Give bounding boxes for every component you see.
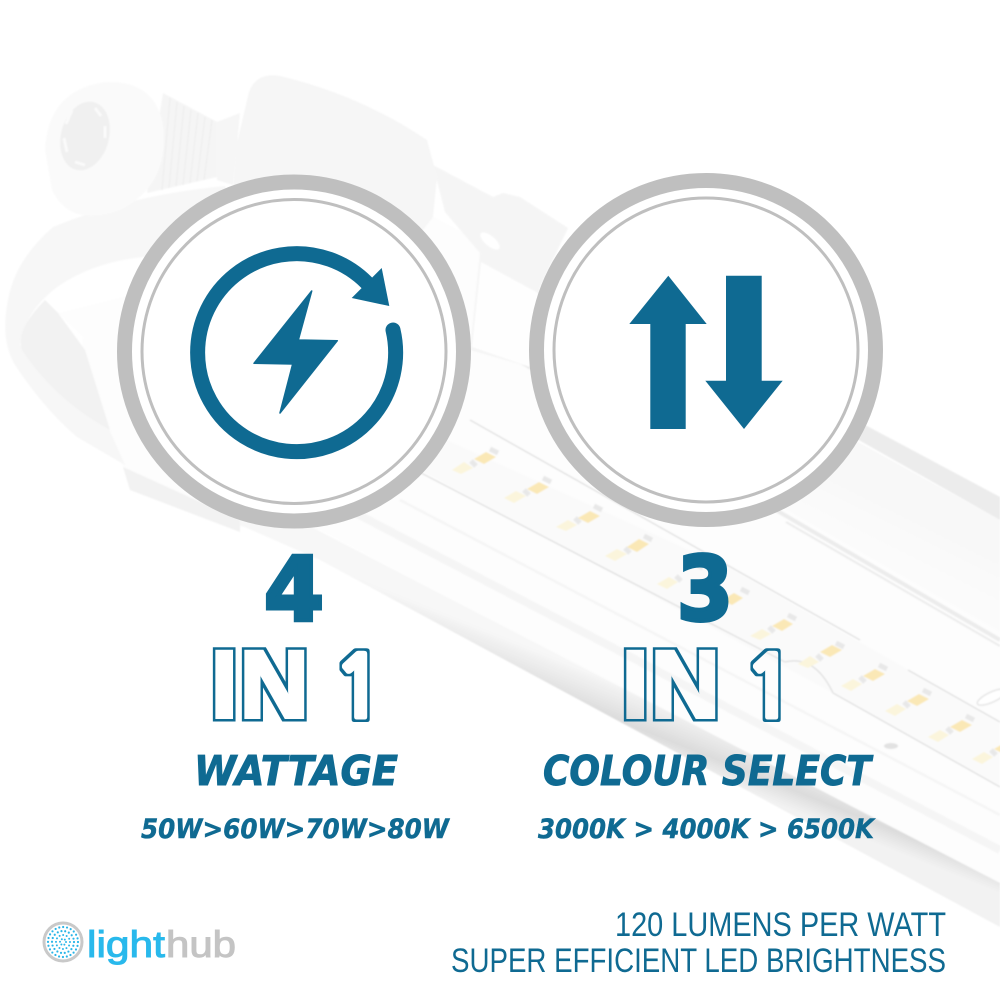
slot (975, 686, 1000, 708)
LED chip pairs (452, 452, 1000, 764)
logo: lighthub (44, 923, 236, 965)
left number: 4: 4 (264, 538, 324, 641)
lumens text (451, 906, 946, 980)
left end clip (123, 467, 240, 532)
icon: up arrow (629, 276, 707, 429)
LED housings (471, 449, 996, 755)
wattage values: 50W>60W>70W>80W (141, 814, 450, 845)
LED strip board (420, 437, 1000, 787)
lamp main body (58, 215, 1000, 885)
screw hole (884, 743, 898, 749)
mounting strap (5, 186, 240, 465)
right outlined text: IN 1: IN 1 (0, 632, 796, 738)
LED strip edge lines (400, 420, 1000, 787)
lower shadow band of lamp (240, 490, 1000, 927)
end cap housing (233, 75, 437, 260)
heading: wattage: WATTAGE (194, 747, 398, 795)
lower diffuser stripes (340, 500, 1000, 850)
logo wordmark: light (87, 924, 166, 965)
logo: lighthub: hub (166, 924, 236, 965)
connector between gland and housing (217, 113, 240, 185)
logo mark (44, 923, 82, 961)
cable gland threads (147, 93, 217, 193)
icon: lightning bolt (254, 291, 337, 413)
icon badge: 3 in 1 colour select (536, 180, 876, 520)
heading: colour select: COLOUR SELECT (543, 747, 874, 795)
icon: down arrow (705, 276, 783, 429)
cable gland (45, 82, 164, 216)
left outlined text: IN 1: IN 1 (0, 632, 385, 738)
badge disc and rings (124, 182, 464, 521)
ridge lines (500, 350, 1000, 646)
icon badge: 4 in 1 wattage (124, 182, 464, 521)
icon: power cycle arrow (198, 254, 396, 452)
upper edge band of lamp (535, 262, 1000, 520)
lumens text: 120 LUMENS PER WATT (615, 906, 946, 944)
colour temperature values: 3000K > 4000K > 6500K (538, 814, 876, 845)
upper diffuser surface (500, 300, 1000, 632)
mounting bracket (433, 165, 568, 367)
right number: 3: 3 (677, 538, 733, 641)
badge disc and rings (536, 180, 876, 520)
